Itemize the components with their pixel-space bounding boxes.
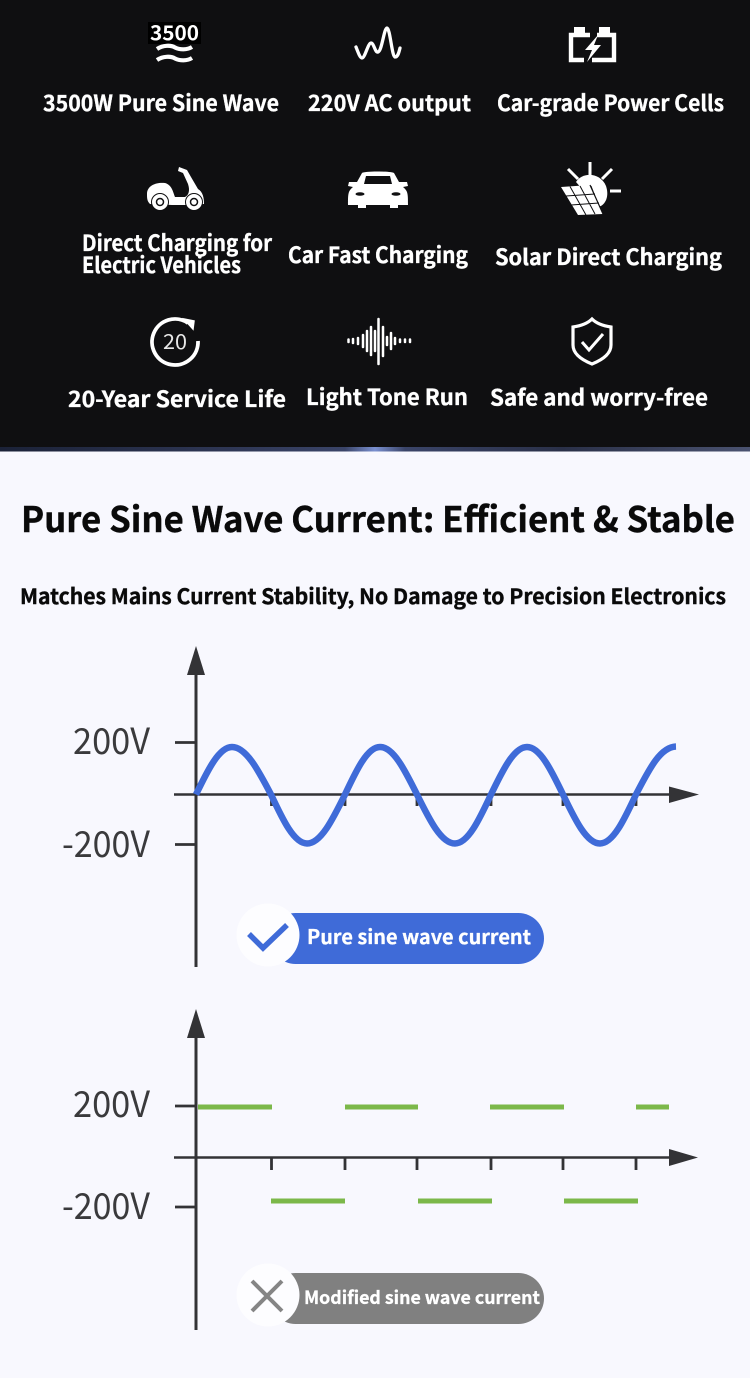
icon: sound wave xyxy=(348,319,410,364)
label: Direct Charging for Electric Vehicles: Electric Vehicles xyxy=(82,248,241,280)
label: 3500W Pure Sine Wave: 3500W Pure Sine Wave xyxy=(43,86,279,118)
label: Safe and worry-free: Safe and worry-free xyxy=(490,380,708,412)
icon: 20-year cycle xyxy=(152,319,198,365)
label: 200V: 200V xyxy=(73,713,150,765)
label: Light Tone Run: Light Tone Run xyxy=(306,380,468,412)
label: 20-Year Service Life: 20-Year Service Life xyxy=(68,382,286,414)
label: Direct Charging for Electric Vehicles xyxy=(82,226,272,280)
icon: safety shield xyxy=(573,319,611,364)
icon: electric scooter xyxy=(147,167,204,210)
badge: modified sine wave current: Modified sine wave current xyxy=(304,1284,540,1310)
title: Pure Sine Wave Current: Efficient & Stable xyxy=(21,492,735,543)
icon: 3500 pure sine wave: 3500 xyxy=(150,17,199,46)
panel: light background xyxy=(0,452,750,1378)
chart: pure sine wave xyxy=(62,646,699,967)
icon: battery cells xyxy=(571,27,614,62)
y axis xyxy=(187,1009,205,1330)
label: -200V: -200V xyxy=(62,1178,150,1230)
badge: modified sine wave current xyxy=(236,1264,544,1326)
label: 220V AC output: 220V AC output xyxy=(308,86,471,118)
sine curve xyxy=(196,746,676,844)
icon: 20-year cycle: 20 xyxy=(163,326,187,355)
x axis xyxy=(174,786,699,803)
label: 200V: 200V xyxy=(73,1076,150,1128)
panel: dark feature grid xyxy=(0,0,750,452)
subtitle: Matches Mains Current Stability, No Damage to Precision Electronics xyxy=(20,581,726,611)
chart: modified sine wave xyxy=(62,1009,698,1330)
label: Solar Direct Charging: Solar Direct Charging xyxy=(495,240,722,272)
label: -200V: -200V xyxy=(62,816,150,868)
y axis xyxy=(187,646,205,967)
modified square wave segments xyxy=(198,1107,669,1201)
icon: solar panel and sun xyxy=(561,162,621,215)
x axis xyxy=(174,1149,698,1166)
badge: pure sine wave current xyxy=(236,904,544,966)
label: Direct Charging for Electric Vehicles: Direct Charging for xyxy=(82,226,272,258)
badge: pure sine wave current: Pure sine wave current xyxy=(307,921,532,950)
label: Car Fast Charging: Car Fast Charging xyxy=(288,238,468,270)
label: Car-grade Power Cells: Car-grade Power Cells xyxy=(497,86,724,118)
icon: 3500 pure sine wave xyxy=(148,17,201,60)
icon: AC waveform xyxy=(356,28,400,58)
icon: car xyxy=(348,172,408,208)
